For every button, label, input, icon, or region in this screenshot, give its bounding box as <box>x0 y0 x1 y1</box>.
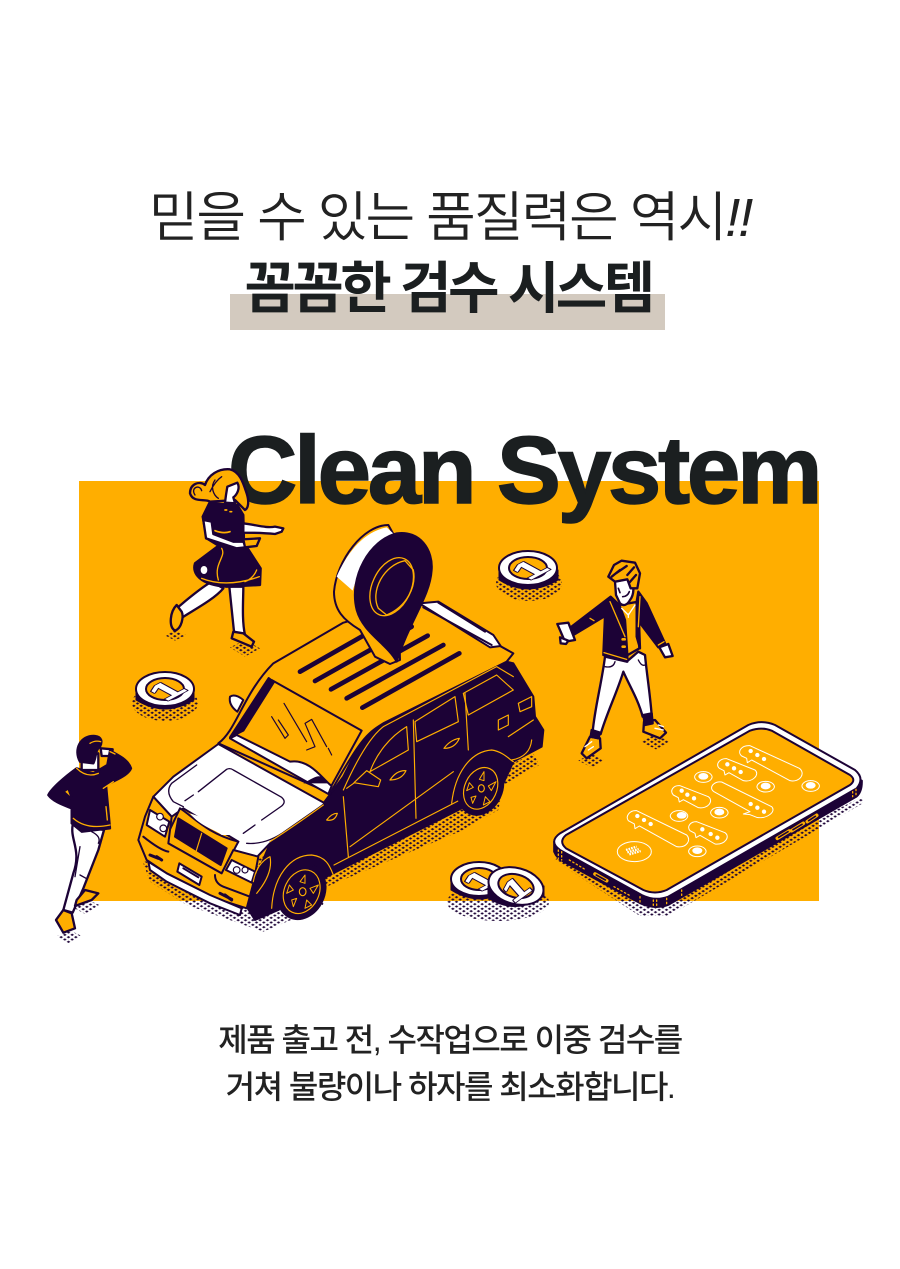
left shoe <box>582 737 601 758</box>
orange background panel <box>79 481 819 901</box>
man back shoe <box>75 890 98 906</box>
coin digit: 1 <box>139 676 195 706</box>
front wheel <box>269 856 334 927</box>
bubble dots <box>637 751 764 838</box>
grille <box>166 808 238 873</box>
heading highlight bar <box>230 294 665 330</box>
front wheel spokes <box>287 875 318 908</box>
rear wheel spokes <box>467 772 496 805</box>
skirt highlight <box>201 566 207 574</box>
jacket trims <box>590 597 664 659</box>
side mirror <box>354 771 381 787</box>
jacket right <box>637 592 665 648</box>
coin inner <box>509 557 547 579</box>
coin digit: 1 <box>502 555 558 585</box>
heading: second line: 꼼꼼한 검수 시스템 <box>244 257 652 320</box>
man hand <box>101 748 113 756</box>
left hand <box>560 637 568 644</box>
hair strands <box>612 566 636 583</box>
hair stripe <box>90 741 101 743</box>
coin left <box>132 672 198 721</box>
front wheel arch <box>253 855 333 908</box>
side buttons <box>595 815 817 881</box>
back coin side <box>451 880 508 899</box>
hood notch <box>190 813 230 835</box>
pin side band <box>334 525 400 664</box>
grille split <box>196 833 202 852</box>
roof rack line <box>423 603 492 645</box>
windshield <box>232 680 362 788</box>
side button centres <box>596 816 815 880</box>
man front shoe <box>56 910 75 933</box>
man looking into distance <box>48 736 131 943</box>
pocket lines <box>605 660 645 667</box>
woman face and neck <box>225 483 239 503</box>
man head hair <box>77 736 101 763</box>
front coin side <box>488 886 544 907</box>
coin shadow <box>132 685 198 721</box>
woman foot shadows <box>164 630 260 657</box>
windshield lower white strip <box>230 735 332 794</box>
bubble 4 <box>712 782 773 818</box>
wiper shadow <box>303 776 328 783</box>
woman front leg <box>229 587 245 635</box>
fog lamps <box>150 855 232 900</box>
tshirt <box>619 602 639 657</box>
jacket buttons <box>623 639 625 647</box>
hood inner panel <box>169 765 325 843</box>
menu grid <box>626 847 641 854</box>
man leg creases <box>75 832 99 878</box>
menu circle <box>617 842 651 862</box>
windshield reflections <box>272 703 332 755</box>
bubble 3 <box>672 786 711 808</box>
hair swirl <box>194 477 222 498</box>
big title: Clean System: Clean System <box>228 417 819 524</box>
sweater trims <box>73 752 115 826</box>
rear wheel arch <box>452 750 513 803</box>
right headlight <box>226 860 255 883</box>
coin shadow <box>496 565 562 601</box>
coin side <box>499 570 558 589</box>
bubble 1 <box>627 811 689 847</box>
man legs <box>63 825 104 913</box>
back coin face <box>451 862 507 896</box>
necklace <box>622 605 635 617</box>
man sweater <box>48 751 131 832</box>
woman front shoe <box>232 632 254 647</box>
right headlight lamps <box>233 867 248 873</box>
woman right arm <box>243 523 283 534</box>
front coin face <box>484 861 548 911</box>
bubble 2 <box>689 822 727 844</box>
rear wheel rim <box>457 762 504 815</box>
window middle <box>415 697 458 742</box>
man foot shadows <box>578 734 671 767</box>
back coin inner <box>461 868 497 890</box>
coin side <box>136 690 194 709</box>
woman left arm <box>203 520 246 548</box>
socks <box>591 713 653 738</box>
licence plate <box>177 863 202 885</box>
front coin digit: 1 <box>495 869 537 909</box>
car with location pin <box>138 525 543 932</box>
body text line 1: 제품 출고 전, 수작업으로 이중 검수를 <box>218 1022 682 1058</box>
windshield pillar <box>230 678 274 737</box>
back coin digit: 1 <box>453 866 509 896</box>
waist gap <box>63 788 73 800</box>
skirt hem <box>202 548 259 583</box>
roof stripes <box>300 617 459 708</box>
smartphone <box>554 722 863 916</box>
man foot shadows <box>56 899 99 943</box>
body text line 2: 거쳐 불량이나 하자를 최소화합니다. <box>226 1069 674 1105</box>
avatars <box>670 772 819 857</box>
pin white top <box>337 527 397 591</box>
torso trims <box>215 510 232 533</box>
coin top right <box>496 551 562 601</box>
rear wheel <box>450 755 512 822</box>
mirror <box>230 696 243 712</box>
face <box>615 578 633 605</box>
window rear <box>463 675 513 715</box>
front coin inner <box>496 870 536 902</box>
jacket left <box>571 597 627 662</box>
window front <box>370 727 408 772</box>
woman running <box>164 469 283 657</box>
bubble 6 <box>740 746 802 781</box>
rear wheel hub <box>478 785 484 792</box>
bumper recess <box>143 837 250 897</box>
bubble 5 <box>718 759 757 781</box>
coin inner <box>146 678 184 700</box>
front left bumper <box>138 797 258 908</box>
grille opening <box>175 818 227 865</box>
woman back shoe <box>171 605 183 631</box>
phone in hand <box>557 623 575 642</box>
lower bumper <box>148 862 242 915</box>
side panel lines <box>270 667 533 865</box>
car side body <box>247 662 543 920</box>
shoe laces <box>585 725 663 750</box>
skirt book <box>243 538 260 547</box>
woman skirt <box>194 542 261 587</box>
door handles and fuel cap <box>327 697 532 820</box>
heading: first line: 믿을 수 있는 품질력은 역시!! <box>149 188 751 248</box>
eye and mouth <box>618 588 629 597</box>
front wheel hub <box>299 888 306 896</box>
man neck <box>82 753 98 770</box>
avatar faces <box>677 773 816 854</box>
left headlight lamps <box>157 813 167 832</box>
right hand <box>659 644 673 657</box>
phone bezel <box>554 722 860 899</box>
coin pair bottom <box>447 861 549 921</box>
car halftone shadow <box>143 753 539 932</box>
car roof <box>218 602 513 793</box>
man with phone <box>557 561 673 767</box>
woman hair <box>190 469 248 510</box>
phone side <box>554 727 862 907</box>
right shoe <box>643 720 666 738</box>
pin ring <box>361 551 422 623</box>
phone halftone shadow <box>554 797 863 916</box>
left headlight <box>147 810 169 837</box>
woman torso <box>203 502 244 547</box>
coin pair shadow <box>447 883 549 921</box>
pin ring inner <box>376 561 414 615</box>
front wheel rim <box>276 864 327 920</box>
coin face <box>499 551 557 585</box>
chat bubbles <box>617 746 819 862</box>
hair <box>608 561 640 588</box>
plate inset <box>183 868 198 877</box>
trousers <box>593 652 652 734</box>
speaker holes and seams <box>558 789 856 907</box>
phone screen <box>562 729 853 892</box>
coin face <box>136 672 194 706</box>
pin dark face <box>355 533 432 662</box>
roof rack <box>419 602 501 647</box>
hood <box>153 744 325 857</box>
woman back leg <box>177 582 223 620</box>
